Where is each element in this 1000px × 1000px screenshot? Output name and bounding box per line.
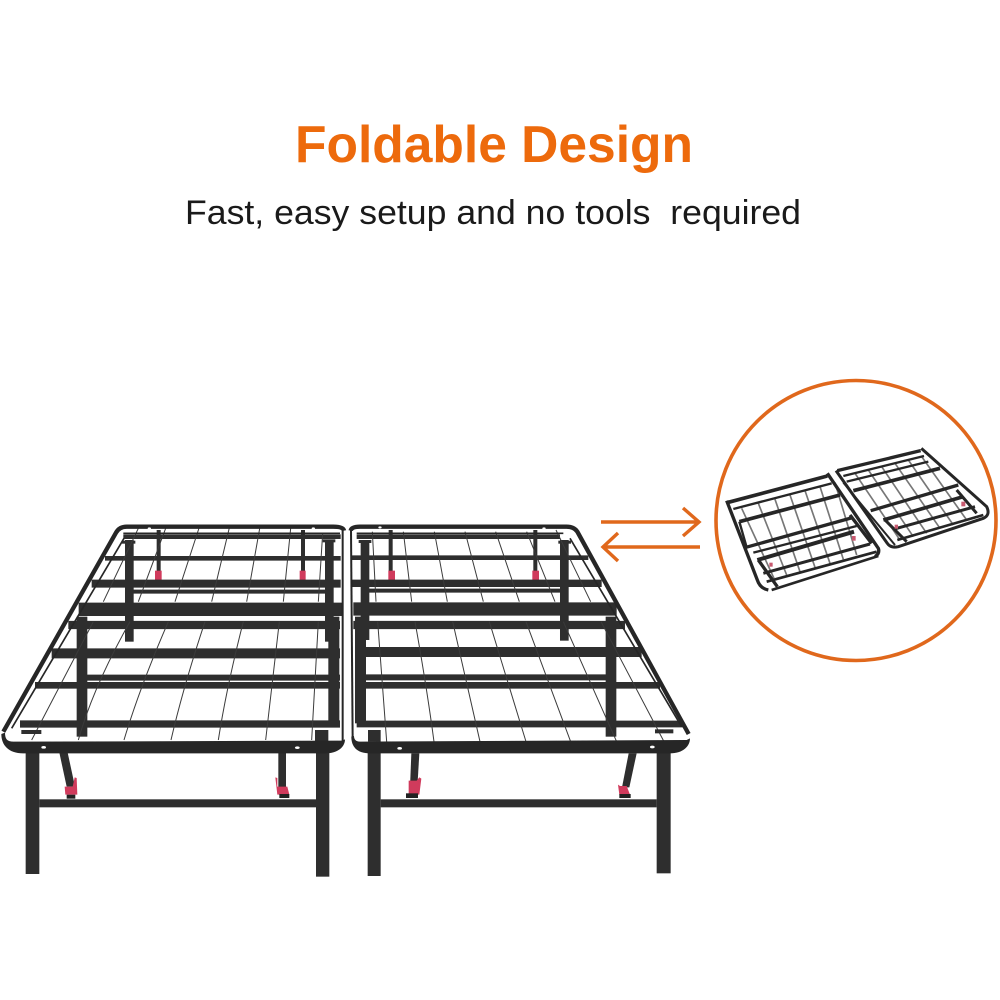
side rails — [836, 448, 988, 547]
red latches — [895, 502, 965, 529]
bolt holes — [41, 527, 315, 749]
subtitle: Fast, easy setup and no tools required — [185, 194, 801, 232]
bed frame: right half — [351, 526, 690, 876]
front red latches — [65, 777, 289, 795]
title: Foldable Design — [295, 116, 693, 174]
back red latches — [155, 571, 306, 580]
back and middle legs — [77, 530, 339, 737]
bed frame: left half — [1, 525, 345, 877]
side rails — [727, 473, 879, 590]
latch feet — [67, 794, 289, 799]
front red latches — [409, 777, 630, 795]
arrow: fold left — [603, 533, 700, 561]
back and middle legs — [355, 530, 616, 737]
inset circle — [716, 380, 996, 660]
front legs — [21, 730, 329, 877]
wire slats — [372, 530, 664, 742]
red latches — [769, 536, 856, 567]
inset: folded frame, right panel — [836, 448, 988, 547]
latch feet — [406, 793, 631, 798]
crossbars — [20, 537, 343, 724]
back red latches — [388, 571, 539, 580]
front rail — [1, 733, 345, 753]
front legs — [368, 729, 673, 876]
wires — [742, 483, 857, 578]
outer rails — [3, 527, 344, 742]
outer rails — [351, 527, 689, 740]
bolt holes — [378, 526, 655, 750]
crossbars — [352, 537, 683, 724]
bars — [837, 451, 983, 540]
inset: folded frame, left panel — [727, 473, 879, 590]
wires — [855, 457, 967, 540]
arrow: fold right — [601, 508, 699, 536]
wire slats — [32, 525, 323, 740]
front rail — [351, 736, 690, 753]
bars — [728, 476, 878, 590]
